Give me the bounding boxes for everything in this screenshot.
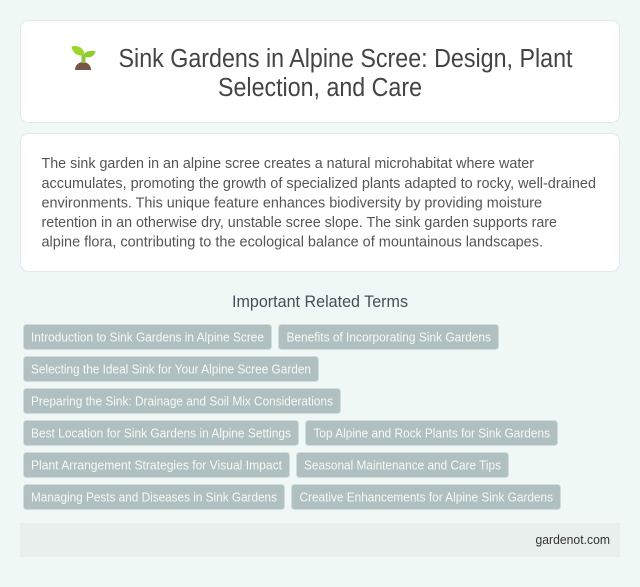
tag: Creative Enhancements for Alpine Sink Gardens — [300, 490, 553, 504]
tag: Benefits of Incorporating Sink Gardens — [286, 330, 491, 344]
tag: Plant Arrangement Strategies for Visual Impact — [31, 458, 282, 472]
text block: description: The sink garden in an alpine scree creates a natural microhabitat where water — [42, 155, 534, 172]
tag: Managing Pests and Diseases in Sink Gardens — [31, 490, 277, 504]
tag — [24, 452, 290, 478]
tag — [24, 420, 298, 446]
text block: description: retention in an otherwise dry, unstable scree slope. The sink garden supports rare — [42, 214, 557, 231]
title: Selection, and Care — [218, 74, 422, 102]
tag — [24, 388, 340, 414]
panel: title header — [20, 20, 620, 122]
tag list: related terms — [24, 324, 560, 510]
tag — [24, 484, 284, 510]
tag: Seasonal Maintenance and Care Tips — [304, 458, 501, 472]
tag: Best Location for Sink Gardens in Alpine Settings — [31, 426, 291, 440]
footer source text: gardenot.com — [536, 532, 610, 547]
tag: Selecting the Ideal Sink for Your Alpine Scree Garden — [31, 362, 311, 376]
heading: related terms: Important Related Terms — [232, 293, 408, 311]
panel: description — [20, 134, 620, 272]
tag: Introduction to Sink Gardens in Alpine Scree — [31, 330, 264, 344]
tag: Preparing the Sink: Drainage and Soil Mix Considerations — [31, 394, 333, 408]
text block: description: accumulates, promoting the growth of specialized plants adapted to rocky, well-drained — [42, 175, 596, 192]
tag — [278, 324, 498, 350]
icon: seedling — [72, 46, 96, 70]
tag — [306, 420, 558, 446]
tag — [24, 356, 318, 382]
tag — [24, 324, 272, 350]
text block: description: alpine flora, contributing to the ecological balance of mountainous landscapes. — [42, 234, 543, 250]
title — [118, 45, 572, 102]
tag — [296, 452, 508, 478]
text block: description — [42, 155, 596, 250]
title: Sink Gardens in Alpine Scree: Design, Plant — [118, 45, 572, 73]
footer — [20, 523, 620, 557]
tag — [292, 484, 560, 510]
tag: Top Alpine and Rock Plants for Sink Gardens — [314, 426, 550, 440]
text block: description: environments. This unique feature enhances biodiversity by providing moisture — [42, 194, 542, 212]
